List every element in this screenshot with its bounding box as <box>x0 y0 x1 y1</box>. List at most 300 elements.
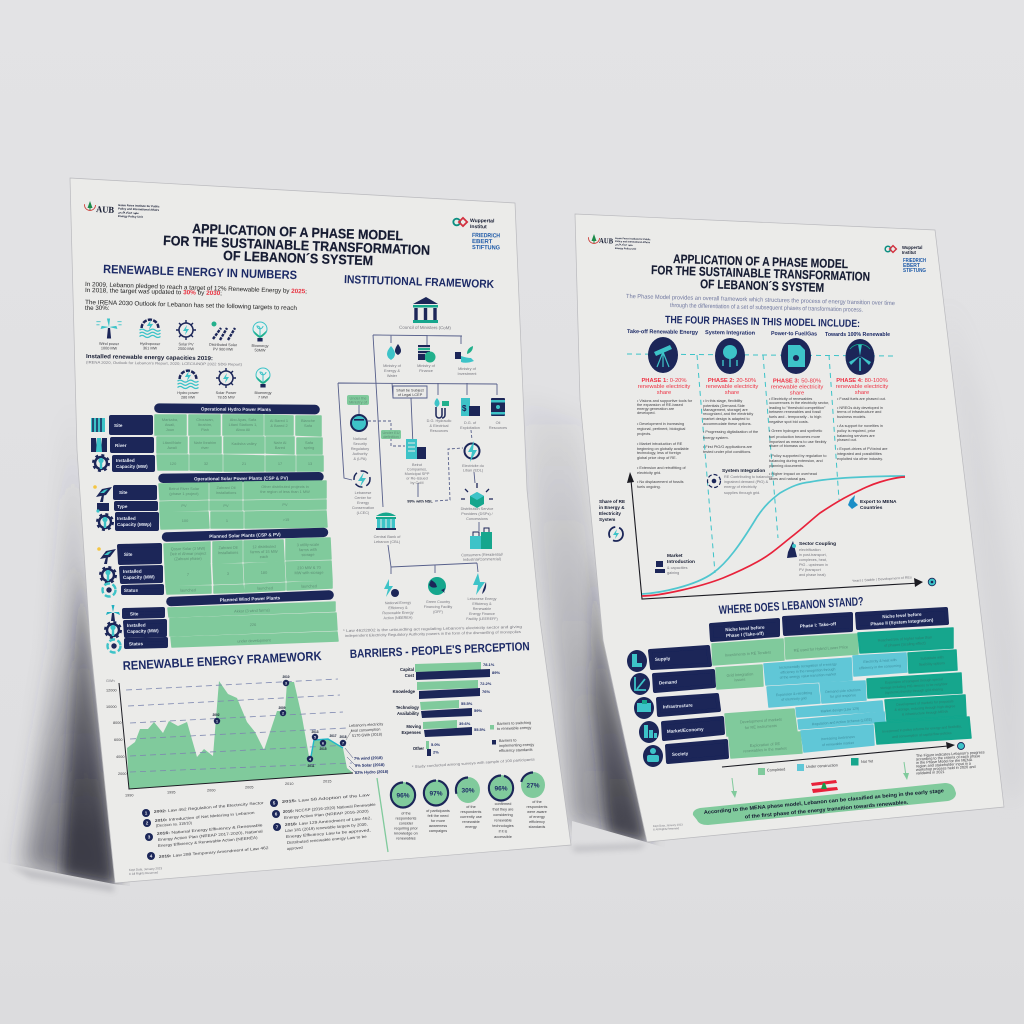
text: installed capacities: Installed renewable energy capacities 2019: <box>86 354 213 362</box>
icon and label: national energy efficiency action: Efficiency & <box>388 606 408 610</box>
area chart: renewable energy generation: 2018 <box>339 735 347 739</box>
area chart: renewable energy generation: 2 <box>282 711 284 715</box>
text: renewable targets: The IRENA 2030 Outlook for Lebanon has set the following targets to reach <box>85 299 298 312</box>
icon and label: lebanese energy efficiency and renewable: Energy Finance <box>469 612 495 616</box>
axis labels: 1990 <box>125 794 133 798</box>
icon and label: ministry of investment: Investment <box>457 371 477 376</box>
timeline list: Energy Efficiency & Renewable Action (NEEREA) <box>158 836 259 848</box>
icon and label: ministry of energy and water: Energy & <box>384 368 400 373</box>
heading: renewable energy in numbers: RENEWABLE ENERGY IN NUMBERS <box>103 262 297 282</box>
icon and label: national regulatory authority: Security <box>353 442 367 446</box>
phase 2 bullets: recognized, and the electricity <box>703 412 753 416</box>
note box: subject of legal law: Shall be Subject <box>396 388 425 392</box>
label: sector coupling: and phase heat) <box>799 573 826 577</box>
area chart: renewable energy generation: 1 <box>216 719 218 723</box>
icon and label: lebanese energy efficiency and renewable: Lebanese Energy <box>468 597 497 601</box>
logo: AUB <box>588 232 651 251</box>
stat: 97%: of participants <box>426 809 450 813</box>
row: infrastructure: storage including PtG devices to be neighbor <box>880 682 949 690</box>
phase 1 bullets: regional, pertinent, biological <box>637 427 685 431</box>
row: infrastructure: for grid response <box>830 693 856 699</box>
timeline list: 3 <box>148 835 151 840</box>
title: OF LEBANON´S SYSTEM <box>700 277 824 295</box>
phase headings in red: renewable electricity <box>706 384 758 390</box>
bar chart: barriers: Expenses <box>401 730 422 735</box>
logo: Wuppertal Institut and Friedrich Ebert Stiftung: Institut <box>470 224 487 230</box>
timeline list: Energy Action Plan (NEEAP 2017-2020), National <box>158 829 263 842</box>
table: planned solar power plants: 210 MW & 70 <box>297 565 322 570</box>
table: operational hydro power plants: 120 <box>170 461 177 466</box>
table: operational solar power plants: Installed <box>117 516 136 521</box>
table: operational hydro power plants: spring <box>304 445 314 450</box>
stat: 27%: 27% <box>526 782 540 790</box>
label: sector coupling: Sector Coupling <box>799 541 836 547</box>
note: law 462 <box>343 625 522 638</box>
logo: Wuppertal Institut and Friedrich Ebert Stiftung: FRIEDRICH <box>472 233 500 239</box>
icon and label: national regulatory authority: Regulatory <box>351 447 369 451</box>
table: operational solar power plants: the region of less than 1 MW <box>260 489 310 494</box>
timeline list: 2 <box>146 821 149 826</box>
icon: axis end <box>928 578 936 586</box>
icon and label: lebanese center for energy conservation: Energy <box>357 501 369 505</box>
heading: where does Lebanon stand: WHERE DOES LEBANON STAND? <box>718 594 864 617</box>
bar chart: barriers: 76% <box>482 689 490 694</box>
axis label: share of RE: in Energy & <box>599 505 625 510</box>
annotation: electricity consumption: 82% Hydro (2018) <box>355 769 389 775</box>
area chart: renewable energy generation: 2013 <box>311 730 319 734</box>
icon: telescope <box>648 337 678 373</box>
row: demand: Grid Integration <box>726 671 753 678</box>
row: infrastructure: (systems) thereby through grid-sharing <box>885 687 943 695</box>
table: planned solar power plants: launched <box>257 585 273 591</box>
table: operational hydro power plants: Bared <box>275 445 285 450</box>
table: operational solar power plants: Capacity (MWp) <box>117 522 152 527</box>
bar chart legend: implementing energy <box>499 743 534 748</box>
phase timeline dashes <box>627 354 895 573</box>
icon and label: ministry of energy and water: Ministry of <box>383 363 402 368</box>
phase 1 bullets: beginning on globally available <box>637 447 689 451</box>
table: operational solar power plants: Installations <box>216 490 236 495</box>
label: under eu: Under EU <box>382 430 400 435</box>
timeline list: 2018: Law 129 Amendment of Law 462, <box>285 816 372 827</box>
icon and label: ministry of finance: Ministry of <box>417 363 436 368</box>
phase 2 bullets: • In this stage, flexibility <box>703 399 742 403</box>
logo: Wuppertal Institut and Friedrich Ebert Stiftung <box>885 245 926 274</box>
row: market and economy: for RE instruments <box>745 723 777 730</box>
table: operational hydro power plants: Site <box>114 423 123 428</box>
icon and label: lebanese energy efficiency and renewable: Efficiency & <box>472 602 492 606</box>
bar chart: barriers: 2% <box>433 750 439 754</box>
phase 2 bullets: accommodate these options. <box>703 422 752 426</box>
row: society <box>643 717 971 767</box>
phase 4 bullets: phased out. <box>837 438 857 442</box>
phase 2 bullets: potentials (Demand-Side <box>703 404 745 408</box>
phase 1 bullets: global price drop of RE. <box>637 456 677 460</box>
bar chart: barriers: 72.2% <box>480 681 492 686</box>
stat: 96%: accessible <box>494 835 512 839</box>
title <box>163 221 430 268</box>
timeline list: 2019: Law 288 Temporary Amendment of Law 462 <box>159 846 269 859</box>
table: planned solar power plants: Planned Solar Plants (CSP & PV) <box>209 532 281 539</box>
legend: Not Yet <box>861 759 874 764</box>
stat: 97%: felt the need <box>428 814 448 818</box>
icon: capacity gear <box>105 622 121 638</box>
icon and label: green financing <box>424 577 452 614</box>
stat: 30%: of the <box>466 805 476 809</box>
icons: installed capacities: Hydro power <box>177 391 199 395</box>
heading: barriers: BARRIERS - PEOPLE'S PERCEPTION <box>350 639 530 661</box>
phase 3 bullets: taxes and natural gas. <box>769 477 806 481</box>
logo: AUB: AUB <box>599 236 613 245</box>
note box: subject of legal law <box>396 388 425 397</box>
icon and label: oil <box>489 398 507 430</box>
icon: solar panel <box>93 485 112 502</box>
table: operational hydro power plants: Joun <box>166 427 174 432</box>
icon and label: consumers <box>461 528 504 562</box>
timeline list <box>142 793 376 860</box>
poster 1 content <box>84 200 548 876</box>
icons: 2030 targets: Bioenergy <box>251 344 269 348</box>
table: planned solar power plants: each <box>260 554 268 559</box>
bar chart: barriers: Availability <box>397 711 420 716</box>
annotation: electricity consumption: 5170 GWh (2018) <box>352 732 383 738</box>
phase 3 bullets: fuels and - temporarily - to high <box>769 415 821 419</box>
phase 1 bullets: • Visions and supportive tools for <box>637 399 693 403</box>
label: export to MENA <box>848 495 897 511</box>
icon: fuel canister <box>781 338 811 374</box>
table: planned solar power plants <box>119 532 332 594</box>
text: installed capacities: (IRENA 2020, Outlook for Lebanon's Report, 2020; LCEC/UNDP 2022 SDG Report) <box>86 361 242 367</box>
table: operational solar power plants: >15 <box>283 517 289 522</box>
icon and label: central bank of lebanon: Central Bank of <box>374 534 401 539</box>
label: under eu: definition <box>383 434 399 439</box>
label: system integration: supplies through grid. <box>724 491 760 495</box>
note: matrix source: according to the criteria of each phase <box>916 754 980 761</box>
icon and label: hydraulic resources <box>427 398 451 433</box>
logo: AUB: معهد عصام فارس <box>118 210 139 215</box>
table: operational hydro power plants: Markaba, <box>162 417 178 422</box>
phase sub-headings: Take-off Renewable Energy <box>627 329 699 336</box>
poster 2: paper <box>575 214 1004 842</box>
logo: AUB: Energy Policy Unit <box>118 214 143 219</box>
icons: 2030 targets: PV 900 MW <box>213 347 234 352</box>
phase sub-headings: Towards 100% Renewable <box>825 332 890 338</box>
stat: 96%: technologies <box>492 824 514 828</box>
label: under the ministry: Under the <box>349 396 367 400</box>
area chart: renewable energy generation: 7 <box>342 741 344 745</box>
row: society: Increasing Awareness <box>821 735 855 741</box>
arrow: green right <box>903 762 909 780</box>
icon and label: ministry of finance: Finance <box>419 368 433 373</box>
bar chart: barriers: Technology <box>396 705 420 710</box>
table: operational hydro power plants: Safa <box>305 440 314 445</box>
axis labels: 2000 <box>207 788 215 792</box>
icons: 2030 targets: 2500 MW <box>178 347 195 351</box>
shadow: floor under left poster <box>10 866 114 892</box>
timeline list: 5 <box>273 801 276 806</box>
label: sector coupling: electrification <box>799 548 821 552</box>
phase headings in red: share <box>855 390 869 396</box>
table: planned solar power plants: 3 utility-scale <box>297 542 319 547</box>
phase headings in red: share <box>657 390 671 396</box>
logo: AUB: Energy Policy Unit <box>615 247 636 251</box>
logo: AUB: AUB <box>96 204 114 215</box>
icon and label: central bank of lebanon <box>374 512 401 544</box>
icon and label: lebanese energy efficiency and renewable: Facility (LEEREFF) <box>466 617 498 621</box>
table: operational hydro power plants: & Bared 2 <box>270 423 288 428</box>
table: operational hydro power plants: Installed <box>116 458 135 463</box>
phase 3 bullets: leading to "threshold competition" <box>769 406 826 410</box>
text: renewable targets: In 2018, the target was updated to 30% by 2030; <box>85 287 222 297</box>
row: market and economy: Development of markets for proposals <box>896 699 954 707</box>
icons: 2030 targets: Solar PV <box>178 342 194 347</box>
stat: 30%: renewable <box>462 820 480 824</box>
phase 2 bullets: tested under pilot conditions. <box>703 450 751 454</box>
phase 4 bullets: terms of infrastructure and <box>837 410 881 414</box>
row: society: and consumption of capital flow policies <box>892 731 952 739</box>
bar chart: barriers: Other <box>413 746 424 751</box>
icons: installed capacities: Solar Power <box>216 391 237 395</box>
axis labels: 8000 <box>113 721 121 725</box>
icons: 2030 targets: Distributed Solar <box>209 343 238 347</box>
phase 4 bullets <box>837 397 888 461</box>
table: planned solar power plants: farms with <box>299 547 317 552</box>
phase 3 bullets: planning documents. <box>769 464 804 468</box>
callout: conclusion: of the first phase of the energy transition towards renewables. <box>745 800 909 820</box>
icon and label: exploitation <box>460 398 480 430</box>
heading: the four phases: THE FOUR PHASES IN THIS MODEL INCLUDE: <box>665 314 860 330</box>
phase 1 bullets <box>637 399 693 489</box>
bar chart: barriers: 5.0% <box>431 742 441 747</box>
table: operational solar power plants: Other distributed projects in <box>261 484 309 489</box>
label: under eu <box>381 430 401 439</box>
row: demand: Demand <box>659 679 677 685</box>
table: operational hydro power plants: Abo Ayas, Safa <box>230 417 257 422</box>
area chart: renewable energy generation: 2017 <box>329 734 337 738</box>
icon: capacity gear <box>100 567 116 583</box>
row: demand: efficiency in the consuming <box>859 664 901 670</box>
stat: 30%: currently use <box>460 815 482 819</box>
stat: 27%: of energy <box>529 815 545 819</box>
table: operational hydro power plants: Ibrahim, <box>198 422 212 427</box>
bar chart: barriers: 59% <box>474 708 482 713</box>
bar chart: barriers: 78.1% <box>483 662 495 667</box>
logo: AUB <box>84 200 160 219</box>
table: planned wind power plants: Site <box>130 611 139 616</box>
row: demand: of the energy value transition market <box>780 672 836 680</box>
phase 3 bullets: fuel production becomes more <box>769 435 820 439</box>
stat: 96%: knowledge on <box>394 832 418 836</box>
column headers: Phase I: Take-off <box>800 621 837 629</box>
icon and label: beirut companies <box>405 439 430 485</box>
footer credit: poster 1 <box>129 866 163 876</box>
icon: status <box>108 640 120 652</box>
timeline list: 7 <box>276 825 279 830</box>
label: system integration <box>708 468 772 495</box>
area chart: renewable energy generation: 2011 <box>308 764 315 768</box>
arrow: green left <box>731 778 737 798</box>
table: planned wind power plants: 226 <box>250 622 256 627</box>
stat: 30%: energy <box>465 825 477 829</box>
row: demand: Substitute with <box>920 655 944 661</box>
stat: 96%: renewables <box>396 836 416 840</box>
bar chart: barriers: 39.6% <box>459 721 471 726</box>
icon and label: consumers: Industrial/Commercial) <box>463 557 502 562</box>
chart: S-curves of phases <box>599 468 936 599</box>
icon and label: central bank of lebanon: Lebanon (CBL) <box>374 539 401 544</box>
table: operational solar power plants <box>115 476 327 529</box>
bar chart legend: efficiency standards <box>499 748 533 753</box>
area chart: renewable energy generation: 3 <box>285 681 287 685</box>
icon and label: distribution service providers: Distribution Service <box>461 507 493 511</box>
row: supply: Investments in RE Tenders <box>725 649 771 658</box>
label: sector coupling <box>787 541 836 577</box>
table: operational hydro power plants: 32 <box>204 461 208 466</box>
grid lines <box>126 679 352 772</box>
phase 4 bullets: • Fossil fuels are phased out. <box>837 397 886 401</box>
logo: AUB: Policy and International Affairs <box>615 240 651 244</box>
icon: solar panel <box>97 547 116 564</box>
icon: capacity gear <box>93 455 109 471</box>
phase 3 bullets: between renewables and fossil <box>769 410 821 414</box>
title: FOR THE SUSTAINABLE TRANSFORMATION <box>651 263 870 284</box>
stat: 30%: 30% <box>461 788 475 794</box>
phase 4 bullets: • NREGs duly developed in <box>837 406 883 410</box>
timeline list: Distributed renewable energy Law to be <box>287 835 367 845</box>
series line <box>310 739 343 762</box>
table: planned solar power plants: MW with storage <box>294 570 324 575</box>
table: planned solar power plants: Deir el Ahmar project <box>170 551 207 556</box>
table: operational solar power plants: 1 <box>226 518 228 523</box>
label: market introduction: Introduction <box>667 559 695 565</box>
icon and label: lebanese energy efficiency and renewable <box>466 573 498 621</box>
label: sector coupling: in post-transport, <box>799 553 827 557</box>
icon and label: electricite du liban: Liban (EDL) <box>463 468 484 472</box>
phase 4 bullets: balancing services are <box>837 434 875 438</box>
stat: 30%: respondents <box>461 810 482 814</box>
phase 4 bullets: business models. <box>837 415 866 419</box>
phase 1 bullets: projects. <box>637 432 651 436</box>
icon and label: ministry of finance <box>417 345 436 373</box>
legend: Under construction <box>806 763 838 769</box>
phase headings in red: PHASE 2: 20-50% <box>708 378 756 384</box>
icons: installed capacities: 286 MW <box>181 396 195 400</box>
icon and label: electricite du liban <box>462 441 484 472</box>
icon and label: council of ministers: Council of Ministers (CoM) <box>399 325 451 330</box>
shadow: between the posters <box>521 400 648 844</box>
icon: type <box>96 503 109 513</box>
bar chart: barriers <box>393 662 535 769</box>
shadow: floor under right of left poster <box>571 843 647 852</box>
area chart: renewable energy generation: 2009 <box>278 706 286 710</box>
row: market and economy: Market/Economy <box>667 727 704 734</box>
note box: subject of legal law: of Legal LCEP <box>398 393 423 397</box>
phase 3 bullets <box>769 397 829 481</box>
icon and label: beirut companies: Companies, <box>407 468 427 472</box>
footer credit: poster 1: Kept Data, January 2023 <box>129 866 163 872</box>
label: export to MENA: Export to MENA <box>860 499 897 505</box>
icons: installed capacities: 7 MW <box>258 396 268 400</box>
text: renewable targets: the 30%: <box>85 305 110 312</box>
icon and label: national regulatory authority: & (LPA) <box>353 457 367 461</box>
icon and label: ministry of investment: Ministry of <box>458 366 477 371</box>
row: demand: flexibility options <box>919 661 945 667</box>
phase 3 bullets: share of biomass use. <box>769 444 806 448</box>
icon and label: ministry of investment <box>455 346 477 376</box>
phase sub-headings <box>627 329 890 338</box>
table: planned solar power plants: Zahrani Oil <box>218 545 238 550</box>
bar chart: barriers: 55.5% <box>474 727 486 732</box>
phase 3 bullets: • Higher impact on overhead <box>769 472 817 476</box>
phase 1 bullets: • Extension and retrofitting of <box>637 466 687 470</box>
icon and label: distribution service providers: Concessions <box>466 517 488 521</box>
timeline list: 6 <box>275 812 278 817</box>
stat: 27%: of the <box>532 800 542 804</box>
label: under the ministry <box>347 395 369 405</box>
column headers: Niche level before <box>882 612 922 619</box>
table: planned wind power plants: Planned Wind Power Plants <box>220 595 281 603</box>
table: operational hydro power plants: Safa <box>304 423 313 428</box>
axis labels: 1995 <box>167 790 175 794</box>
logo: Wuppertal Institut and Friedrich Ebert Stiftung <box>453 218 500 251</box>
table: operational solar power plants: Zahrani Oil <box>216 485 236 490</box>
table: operational solar power plants: PV <box>282 502 288 507</box>
row: infrastructure: Expansion & retrofitting <box>776 691 812 697</box>
table: operational hydro power plants <box>111 406 323 471</box>
logo: Wuppertal Institut and Friedrich Ebert Stiftung: EBERT <box>472 239 493 245</box>
timeline list: 4 <box>150 854 153 859</box>
intro text <box>626 294 896 314</box>
icon and label: beirut companies: or Re-issued <box>406 476 428 480</box>
table: planned wind power plants: Installed <box>127 623 146 628</box>
icon and label: green financing: Green Country <box>426 600 450 604</box>
stat: 27%: efficiency <box>529 820 545 824</box>
icon: dam <box>91 418 105 432</box>
table: planned solar power plants: (Zahrani phase) <box>174 556 202 561</box>
icon and label: lebanese center for energy conservation: Conservation <box>352 506 374 510</box>
phase 2 bullets: energy system. <box>703 436 729 440</box>
timeline list: (Decision no. 318/10) <box>156 821 193 828</box>
icon: system integration <box>715 338 745 374</box>
icon and label: distribution service providers <box>461 483 494 521</box>
label: export to MENA: Countries <box>860 505 883 511</box>
row: market and economy <box>639 695 966 743</box>
table: operational solar power plants: Type <box>117 504 128 509</box>
note: matrix source <box>916 750 985 775</box>
icons: installed capacities <box>177 368 272 400</box>
axis label: share of RE: Electricity <box>599 511 621 516</box>
poster 2 content <box>588 232 985 831</box>
icons: 2030 targets <box>96 319 269 353</box>
row: market and economy: Development of markets <box>740 717 782 724</box>
annotation: electricity consumption <box>345 722 389 775</box>
icon: river <box>91 438 107 452</box>
icons: installed capacities: 78.65 MW <box>217 396 235 400</box>
table: operational hydro power plants: Abou Ali <box>236 427 250 432</box>
intro text: The Phase Model provides an overall framework which structures the process of energy transition over time <box>626 294 896 307</box>
table: planned solar power plants: launched <box>301 583 317 589</box>
timeline list: Energy Efficiency Law to be approved, <box>286 828 371 839</box>
logo: AUB: Policy and International Affairs <box>118 207 160 212</box>
phase 3 bullets: occurrences in the electricity sector, <box>769 401 829 405</box>
heading: institutional framework: INSTITUTIONAL FRAMEWORK <box>344 274 495 291</box>
table: planned solar power plants: Qosor Solar (3 MW) <box>171 546 206 551</box>
phase headings in red: renewable electricity <box>836 384 888 390</box>
survey result circles <box>391 772 548 840</box>
phase 2 bullets: market design is adapted to <box>703 417 750 421</box>
table: operational hydro power plants: 17 <box>278 461 282 466</box>
icon and label: consumers: Consumers (Residential/ <box>461 553 504 557</box>
